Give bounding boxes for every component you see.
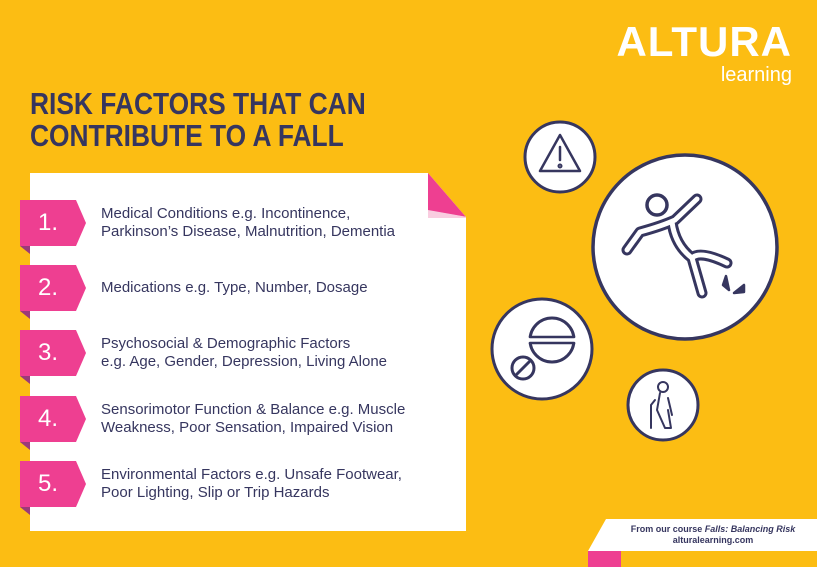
panel: risk factors list [20,173,466,531]
item 4: Weakness, Poor Sensation, Impaired Vision [101,419,393,436]
logo [616,18,792,86]
item 3: Psychosocial & Demographic Factors [101,335,350,352]
footer credit: From our course Falls: Balancing Risk [631,524,795,534]
item 1: Parkinson’s Disease, Malnutrition, Dementia [101,223,395,240]
icon: warning [525,122,595,192]
item 4: 4. [38,405,58,432]
item 4 [20,396,405,450]
title [30,86,366,153]
item 5: Environmental Factors e.g. Unsafe Footwear, [101,466,402,483]
item 1: 1. [38,209,58,236]
footer credit: alturalearning.com [673,535,753,545]
item 1: Medical Conditions e.g. Incontinence, [101,205,350,222]
footer credit [588,519,817,567]
item 5: Poor Lighting, Slip or Trip Hazards [101,484,329,501]
item 2: Medications e.g. Type, Number, Dosage [101,279,368,296]
item 3: e.g. Age, Gender, Depression, Living Alone [101,353,387,370]
item 3: 3. [38,339,58,366]
icon: elderly person [628,370,698,440]
logo: ALTURA [616,18,792,65]
item 4: Sensorimotor Function & Balance e.g. Muscle [101,401,405,418]
item 1 [20,200,395,254]
white card [30,173,466,531]
item 2: 2. [38,274,58,301]
title: RISK FACTORS THAT CAN [30,86,366,121]
title: CONTRIBUTE TO A FALL [30,118,344,153]
icon: pills [492,299,592,399]
logo: learning [721,64,792,86]
folded corner [428,173,466,217]
item 3 [20,330,387,384]
item 5 [20,461,402,515]
item 5: 5. [38,470,58,497]
item 2 [20,265,368,319]
icon: falling person [593,155,777,339]
